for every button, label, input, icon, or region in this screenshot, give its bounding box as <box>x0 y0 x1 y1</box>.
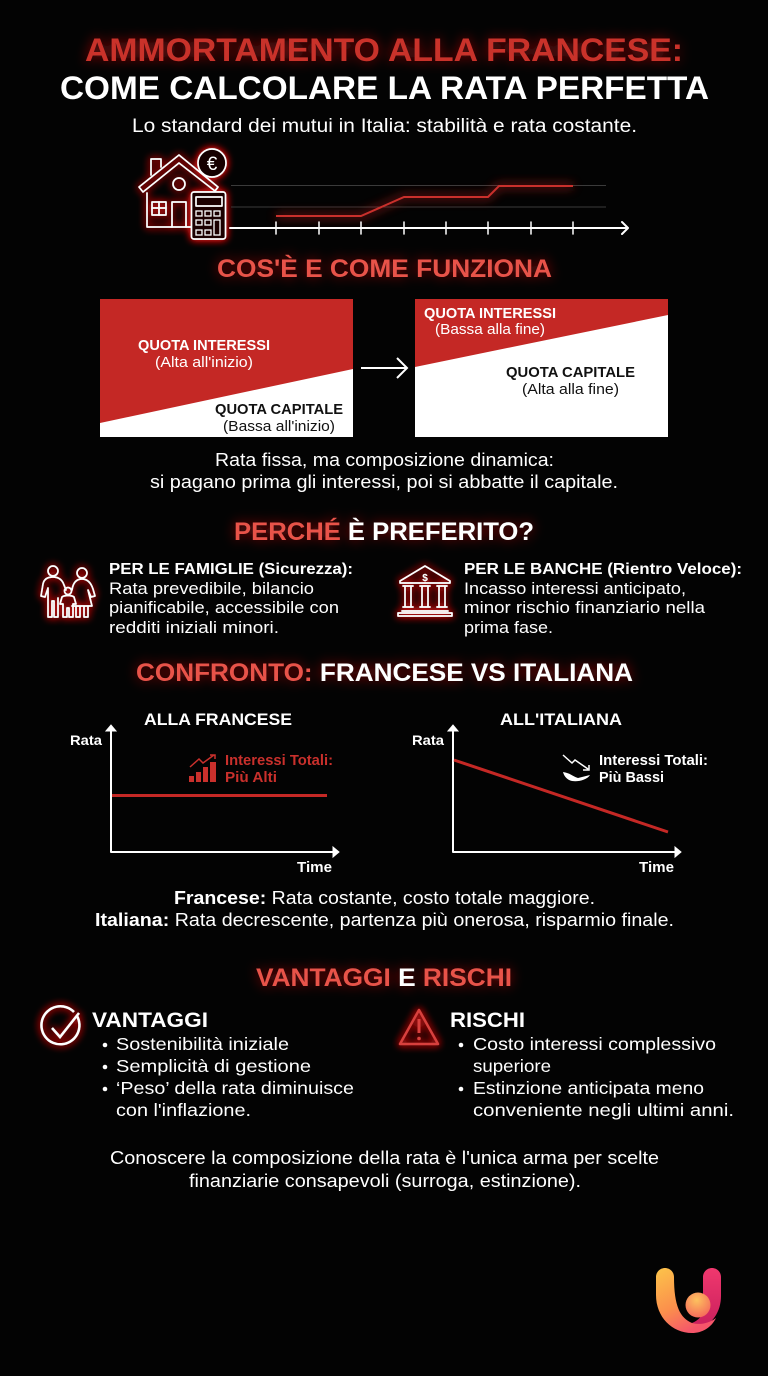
chart: all'italiana: Più Bassi <box>599 770 664 786</box>
diagram: quota inizio <box>100 299 353 437</box>
icon: bank: $ <box>422 573 428 584</box>
chart: alla francese <box>70 710 339 876</box>
chart: alla francese: Time <box>297 860 332 876</box>
time axis <box>230 222 628 234</box>
list: rischi: Estinzione anticipata meno <box>473 1078 704 1098</box>
list: vantaggi: Sostenibilità iniziale <box>116 1034 289 1054</box>
chart: alla francese: Interessi Totali: <box>225 753 333 769</box>
text: per le famiglie <box>109 561 353 637</box>
grid lines <box>231 186 606 207</box>
rate step line <box>276 186 573 216</box>
icon: check <box>41 1006 79 1044</box>
diagram: quota inizio: QUOTA INTERESSI <box>138 337 270 354</box>
icon: warning <box>400 1010 438 1044</box>
explanation text: si pagano prima gli interessi, poi si abbatte il capitale. <box>150 472 618 492</box>
title: COME CALCOLARE LA RATA PERFETTA <box>60 70 709 106</box>
diagram: quota inizio: (Alta all'inizio) <box>155 355 253 371</box>
diagram: quota fine: QUOTA INTERESSI <box>424 305 556 322</box>
closing text: Conoscere la composizione della rata è l'unica arma per scelte <box>110 1148 659 1168</box>
diagram: quota fine: QUOTA CAPITALE <box>506 364 635 381</box>
logo <box>656 1268 721 1333</box>
text: per le famiglie: PER LE FAMIGLIE (Sicurezza): <box>109 561 353 578</box>
closing text <box>110 1148 659 1191</box>
chart: alla francese: Più Alti <box>225 770 277 786</box>
text: per le banche: minor rischio finanziario nella <box>464 599 706 617</box>
title <box>60 32 709 106</box>
comparison text <box>95 888 674 930</box>
explanation text: Rata fissa, ma composizione dinamica: <box>215 450 554 470</box>
comparison text: Francese: Rata costante, costo totale maggiore. <box>174 888 595 908</box>
heading: vantaggi e rischi: VANTAGGI E RISCHI <box>256 964 512 992</box>
diagram: quota inizio: (Bassa all'inizio) <box>223 419 335 435</box>
list: vantaggi: VANTAGGI <box>92 1009 208 1032</box>
list: rischi: conveniente negli ultimi anni. <box>473 1100 734 1120</box>
comparison text: Italiana: Rata decrescente, partenza più onerosa, risparmio finale. <box>95 910 674 930</box>
list: rischi <box>450 1009 734 1120</box>
title: AMMORTAMENTO ALLA FRANCESE: <box>85 32 683 68</box>
list: vantaggi: Semplicità di gestione <box>116 1056 311 1076</box>
heading: perché è preferito: PERCHÉ È PREFERITO? <box>234 517 534 546</box>
icon: bank <box>398 566 452 616</box>
text: per le famiglie: Rata prevedibile, bilancio <box>109 580 314 598</box>
text: per le banche: prima fase. <box>464 619 553 637</box>
list: rischi: superiore <box>473 1056 551 1076</box>
icon: house with calculator and euro <box>139 149 226 239</box>
diagram: quota fine: (Bassa alla fine) <box>435 322 545 338</box>
chart: alla francese: Rata <box>70 732 102 748</box>
diagram: quota inizio: QUOTA CAPITALE <box>215 401 343 418</box>
list: vantaggi: con l'inflazione. <box>116 1100 251 1120</box>
heading: confronto: CONFRONTO: FRANCESE VS ITALIANA <box>136 659 633 687</box>
arrow <box>361 358 407 378</box>
chart: alla francese: ALLA FRANCESE <box>144 710 292 729</box>
diagram: quota fine <box>415 299 668 437</box>
icon: family <box>41 566 95 617</box>
closing text: finanziarie consapevoli (surroga, estinzione). <box>189 1171 581 1191</box>
list: rischi: RISCHI <box>450 1009 525 1032</box>
explanation text <box>150 450 618 492</box>
icon: house with calculator and euro: € <box>207 154 218 175</box>
heading: cos'è e come funziona: COS'È E COME FUNZIONA <box>217 254 552 283</box>
chart: all'italiana: Rata <box>412 732 444 748</box>
list: vantaggi: ‘Peso’ della rata diminuisce <box>116 1078 354 1098</box>
chart: all'italiana: Interessi Totali: <box>599 753 708 769</box>
text: per le famiglie: pianificabile, accessibile con <box>109 599 339 617</box>
text: per le banche: PER LE BANCHE (Rientro Veloce): <box>464 561 742 578</box>
subtitle: Lo standard dei mutui in Italia: stabilità e rata costante. <box>132 116 637 137</box>
diagram: quota fine: (Alta alla fine) <box>522 382 619 398</box>
list: rischi: Costo interessi complessivo <box>473 1034 716 1054</box>
chart: all'italiana: Time <box>639 860 674 876</box>
text: per le banche <box>464 561 742 637</box>
icon: falling arrow and hand <box>563 755 590 781</box>
text: per le famiglie: redditi iniziali minori. <box>109 619 279 637</box>
icon: rising bars <box>189 755 216 782</box>
chart: all'italiana: ALL'ITALIANA <box>500 710 622 729</box>
list: vantaggi <box>92 1009 354 1120</box>
chart: all'italiana <box>412 710 708 876</box>
text: per le banche: Incasso interessi anticipato, <box>464 580 686 598</box>
